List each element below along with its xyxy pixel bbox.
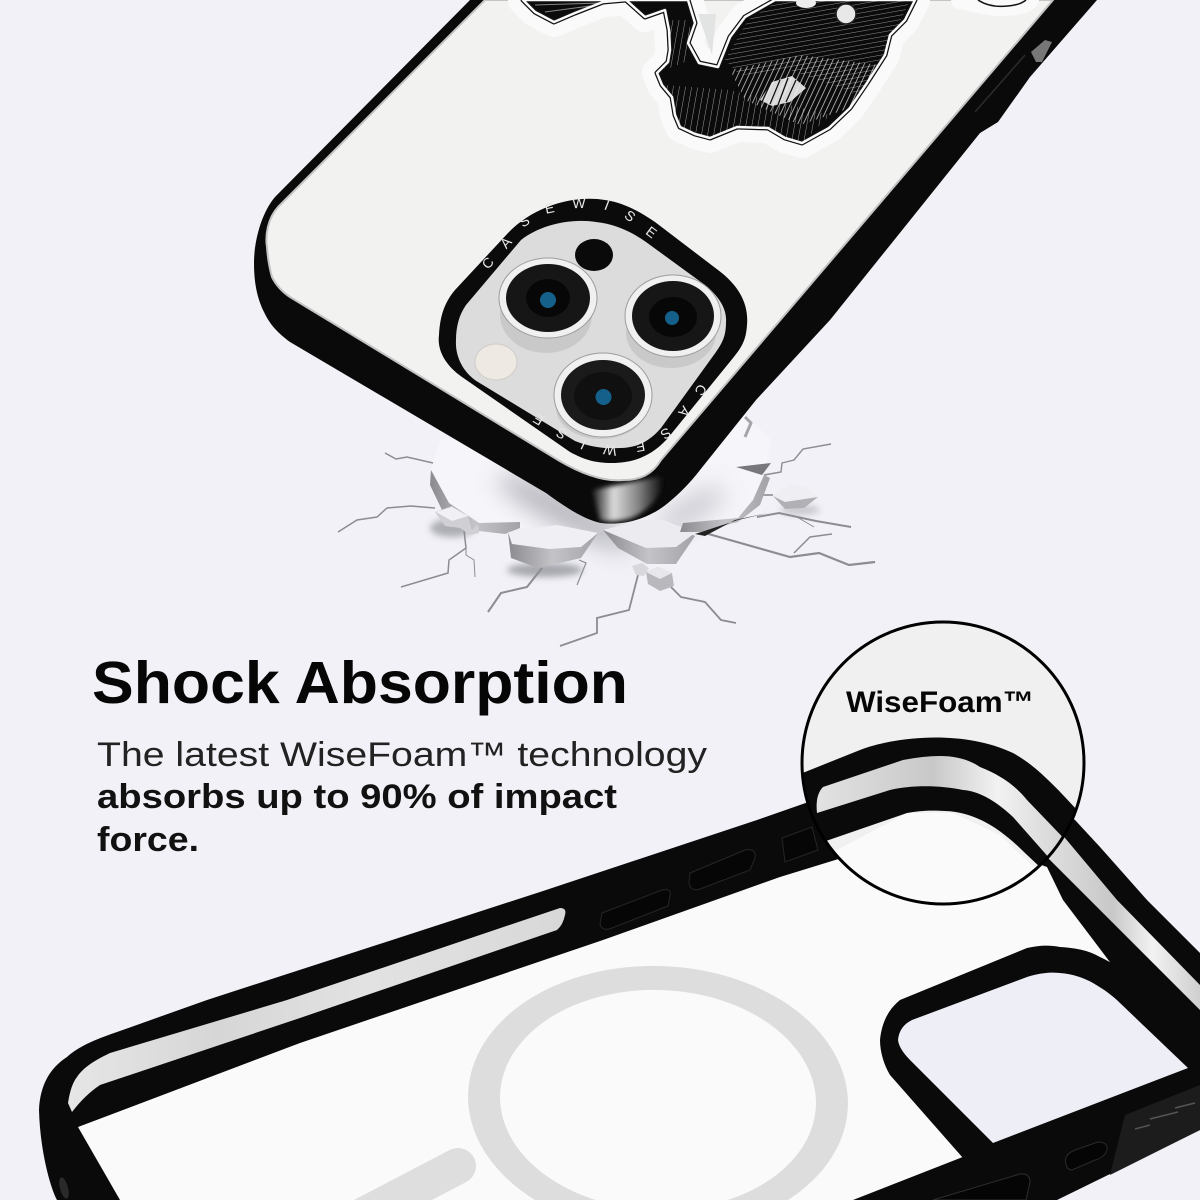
side switch [782, 827, 818, 862]
outline offset [523, 0, 915, 143]
camera bump ring [439, 199, 747, 463]
flash [475, 344, 517, 380]
bottom band detail [1110, 1085, 1200, 1175]
screen back panel [266, 0, 1053, 480]
foam band right [1040, 832, 1200, 1010]
rock fragment left [435, 506, 479, 535]
left slab edge [430, 470, 520, 534]
lens three [554, 353, 652, 439]
magnetic ring stem [345, 1166, 458, 1200]
artwork: ink sketch [523, 0, 1030, 143]
foam band left [68, 908, 565, 1112]
microphone hole [575, 239, 613, 271]
magnified case edge [804, 738, 1075, 866]
side button highlight [1031, 40, 1052, 62]
port [1065, 1142, 1107, 1170]
case frame [254, 0, 1097, 524]
bottom button [933, 1174, 1030, 1200]
magnified foam band [816, 756, 1062, 856]
side button two [689, 850, 755, 890]
rock piece two [603, 520, 695, 564]
raised slab surface [431, 415, 771, 533]
callout label: WiseFoam™ [846, 686, 1034, 719]
clear back panel [78, 840, 1190, 1200]
crack lines [338, 417, 875, 646]
side hole [57, 1176, 71, 1200]
right slab edge [680, 475, 770, 532]
camera cutout frame [880, 946, 1200, 1158]
magnetic ring [463, 959, 853, 1200]
clear panel in lens [835, 813, 1034, 902]
top phone with case [254, 0, 1097, 524]
heading: Shock Absorption [92, 650, 628, 716]
body text: The latest WiseFoam™ technology [97, 736, 707, 774]
body text: force. [97, 821, 199, 859]
rock piece one [508, 526, 598, 568]
small rocks bottom [632, 563, 649, 576]
camera module plate [456, 221, 726, 448]
open case bottom [39, 770, 1200, 1200]
body text: absorbs up to 90% of impact [97, 778, 617, 816]
lens two [625, 275, 721, 368]
text: CASEWISE ring top: CASEWISE [483, 198, 658, 268]
case silhouette [39, 770, 1200, 1200]
rock fragment right [773, 484, 818, 508]
lens one [499, 258, 597, 353]
cracked surface illustration [338, 415, 875, 646]
magnified callout: WiseFoam [800, 620, 1086, 906]
side button one [600, 890, 670, 929]
camera cutout [898, 973, 1188, 1143]
case gloss reflection [592, 476, 663, 521]
body text [97, 736, 707, 859]
text: CASEWISE ring bottom: CASEWISE [532, 385, 706, 456]
